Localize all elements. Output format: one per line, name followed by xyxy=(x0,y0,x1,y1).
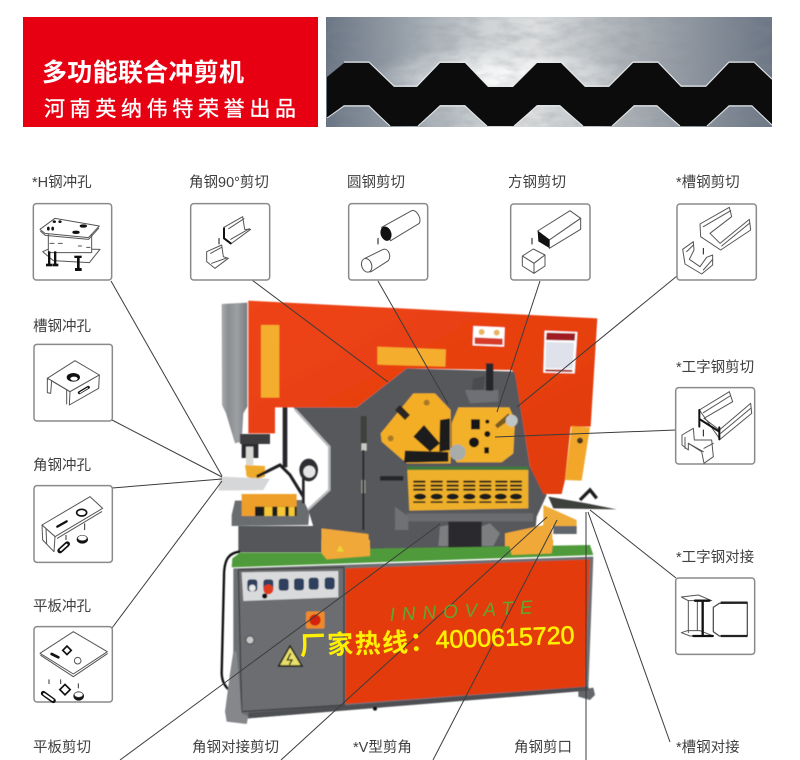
item: angle steel punching xyxy=(33,457,112,562)
item: square steel shear xyxy=(508,173,590,280)
bottom labels xyxy=(33,738,740,756)
item: I beam butt joint xyxy=(676,549,755,654)
top shear press xyxy=(465,363,498,403)
icon: round bar shear xyxy=(349,204,428,280)
label: *工字钢剪切 xyxy=(676,358,754,376)
hotline: 厂家热线： xyxy=(299,626,436,661)
right punch block xyxy=(450,407,518,462)
orange box bottoms xyxy=(322,540,370,559)
grey cabinet door xyxy=(238,567,344,712)
door handle xyxy=(246,636,254,644)
watermark: INNOVATE xyxy=(389,598,533,626)
title: 多功能联合冲剪机 xyxy=(42,59,244,87)
panel: red title banner xyxy=(23,17,318,127)
label: *槽钢剪切 xyxy=(676,173,740,191)
item: flat plate punching xyxy=(33,597,112,702)
panel: steel plate with zigzag cut xyxy=(326,17,772,127)
main switch xyxy=(306,611,325,629)
left orange guard box xyxy=(322,528,370,553)
label: angle butt shear: 角钢对接剪切 xyxy=(192,738,279,756)
item: I beam shear xyxy=(676,358,755,464)
red upper housing xyxy=(248,301,597,494)
icon: channel punching xyxy=(34,344,112,421)
power cable xyxy=(222,552,240,690)
label: 角钢冲孔 xyxy=(33,457,91,474)
label: *工字钢对接 xyxy=(676,549,754,566)
label: 槽钢冲孔 xyxy=(33,318,91,335)
safety label xyxy=(543,331,577,373)
punch cylinder xyxy=(222,303,247,443)
yellow side plate xyxy=(565,426,590,481)
right foot xyxy=(578,688,595,700)
lower guard shapes xyxy=(395,507,533,550)
base line and bolts xyxy=(248,687,588,718)
hydraulic fittings xyxy=(361,416,403,530)
label: *H钢冲孔 xyxy=(32,174,92,191)
leader lines xyxy=(111,276,677,760)
right orange guard box xyxy=(505,523,553,553)
red door panel xyxy=(346,559,590,704)
yellow name plate xyxy=(377,347,446,367)
green deck xyxy=(232,545,593,567)
hazard sign xyxy=(279,646,302,666)
grey column and frame xyxy=(293,368,547,553)
icon: I beam shear xyxy=(676,388,755,464)
machine: upper body xyxy=(218,301,617,553)
icon: flat plate punching xyxy=(34,627,112,702)
frame xyxy=(233,557,593,718)
label: angle notching: 角钢剪口 xyxy=(514,738,572,756)
label: 角钢90°剪切 xyxy=(189,173,269,191)
yellow plate on the arm xyxy=(261,325,279,398)
label: V corner shear: *V型剪角 xyxy=(353,738,412,756)
icon: channel shear xyxy=(677,204,756,280)
item: angle steel 90 degree shear xyxy=(189,173,270,280)
icon: I beam butt joint xyxy=(676,578,755,654)
icon: H beam punching xyxy=(33,204,112,280)
label: flat plate shear: 平板剪切 xyxy=(33,738,91,756)
label: 方钢剪切 xyxy=(508,173,566,191)
icon: angle steel shear xyxy=(191,204,270,280)
subtitle: 河南英纳伟特荣誉出品 xyxy=(44,98,296,121)
label: channel butt joint: *槽钢对接 xyxy=(676,739,740,756)
yellow grill guard xyxy=(407,467,528,511)
right shear table xyxy=(543,490,617,534)
item: channel steel shear xyxy=(676,173,756,280)
hotline: 4000615720 xyxy=(435,621,575,654)
icon: angle punching xyxy=(34,486,112,562)
button strip xyxy=(242,571,338,601)
yellow punch die block xyxy=(242,494,297,516)
item: round steel shear xyxy=(347,173,428,280)
left shear octagon xyxy=(381,393,451,463)
left foot xyxy=(225,652,248,724)
round lamp xyxy=(299,459,318,503)
label: 平板冲孔 xyxy=(33,597,91,615)
yellow punch stripper xyxy=(245,465,265,480)
machine: lower cabinet xyxy=(222,540,595,724)
item: H steel punching xyxy=(32,174,112,280)
icon: square bar shear xyxy=(511,204,590,280)
label: 圆钢剪切 xyxy=(347,173,405,191)
item: channel steel punching xyxy=(33,318,112,421)
table xyxy=(232,500,309,526)
warning sticker xyxy=(473,326,505,347)
